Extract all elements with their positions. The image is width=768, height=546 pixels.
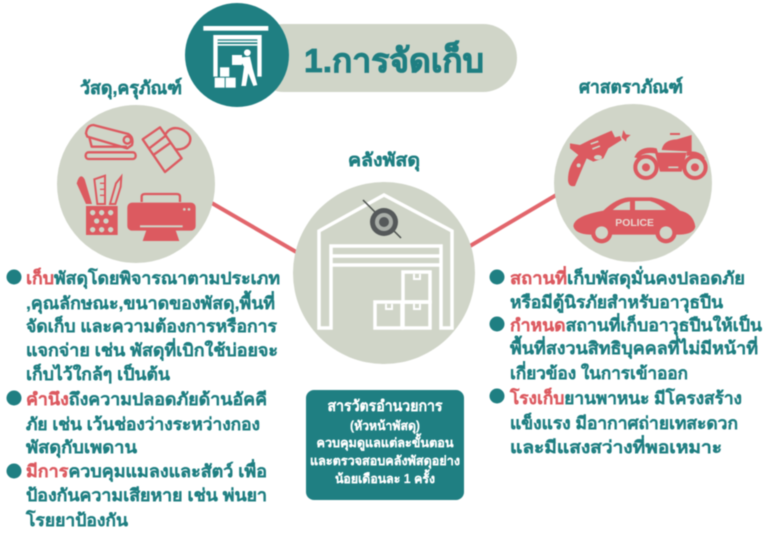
bullet 3: และมีแสงสว่างที่พอเหมาะ <box>510 435 722 457</box>
bullet 1: สถานที่เก็บพัสดุมั่นคงปลอดภัย <box>510 266 745 289</box>
icon: pen cup <box>77 176 121 235</box>
left bullet list <box>6 266 280 530</box>
bullet 2: กำหนดสถานที่เก็บอาวุธปืนให้เป็น <box>510 313 762 336</box>
panel: weapons circle <box>554 104 712 262</box>
title pill <box>250 24 517 92</box>
bullet 1: แจกจ่าย เช่น พัสดุที่เบิกใช้บ่อยจะ <box>26 338 278 361</box>
title banner <box>185 3 517 107</box>
bullet 1: หรือมีตู้นิรภัยสำหรับอาวุธปืน <box>510 292 723 314</box>
icon: warehouse outline <box>319 195 452 328</box>
bullet 3: ป้องกันความเสียหาย เช่น พ่นยา <box>26 485 267 505</box>
bullet 2: พัสดุกับเพดาน <box>26 438 137 458</box>
bullet 2: คำนึงถึงความปลอดภัยด้านอัคคี <box>26 389 267 409</box>
bullet 1: เก็บไว้ใกล้ๆ เป็นต้น <box>26 362 170 384</box>
callout: supply officer: ควบคุมดูแลแต่ละขั้นตอน <box>316 433 454 451</box>
right bullet list <box>490 266 762 457</box>
icon: stapler <box>86 125 136 159</box>
icon: warehouse worker <box>185 3 289 107</box>
icon: seal emblem <box>363 200 401 238</box>
icon: revolver <box>568 130 631 186</box>
callout: supply officer <box>306 390 464 500</box>
bullet 1 <box>490 266 745 314</box>
heading: warehouse: คลังพัสดุ <box>348 150 420 172</box>
bullet 1: เก็บพัสดุโดยพิจารณาตามประเภท <box>26 266 280 289</box>
callout: supply officer: และตรวจสอบคลังพัสดุอย่าง <box>310 454 460 469</box>
car label: POLICE <box>615 218 654 229</box>
panel: warehouse circle <box>293 182 475 364</box>
heading: materials: วัสดุ,ครุภัณฑ์ <box>80 77 182 100</box>
heading: weapons: ศาสตราภัณฑ์ <box>579 76 683 97</box>
callout: supply officer: สารวัตรอำนวยการ <box>328 398 443 415</box>
bullet 1 <box>6 266 280 384</box>
icon: binder clips <box>143 127 190 172</box>
bullet 3 <box>490 386 742 457</box>
callout: supply officer: (หัวหน้าพัสดุ) <box>350 419 420 434</box>
callout: supply officer: น้อยเดือนละ 1 ครั้ง <box>335 469 435 486</box>
connector lines <box>210 194 558 253</box>
bullet 3 <box>6 459 267 530</box>
title text: 1.การจัดเก็บ <box>304 40 484 79</box>
icon: printer <box>127 194 196 241</box>
bullet 3: โรงเก็บยานพาหนะ มีโครงสร้าง <box>509 386 742 408</box>
bullet 2: พื้นที่สงวนสิทธิบุคคลที่ไม่มีหน้าที่ <box>510 335 758 359</box>
bullet 2 <box>490 313 762 383</box>
bullet 2 <box>6 389 267 458</box>
bullet 1: จัดเก็บ และความต้องการหรือการ <box>26 314 278 336</box>
bullet 3: มีการควบคุมแมลงและสัตว์ เพื่อ <box>26 459 267 482</box>
bullet 3: แข็งแรง มีอากาศถ่ายเทสะดวก <box>510 411 738 433</box>
icon: motorcycle <box>634 134 706 178</box>
bullet 3: โรยยาป้องกัน <box>25 510 128 530</box>
bullet 2: เกี่ยวข้อง ในการเข้าออก <box>510 361 688 383</box>
bullet 2: ภัย เช่น เว้นช่องว่างระหว่างกอง <box>26 415 260 434</box>
bullet 1: ,คุณลักษณะ,ขนาดของพัสดุ,พื้นที่ <box>26 290 275 314</box>
panel: materials circle <box>57 105 215 263</box>
